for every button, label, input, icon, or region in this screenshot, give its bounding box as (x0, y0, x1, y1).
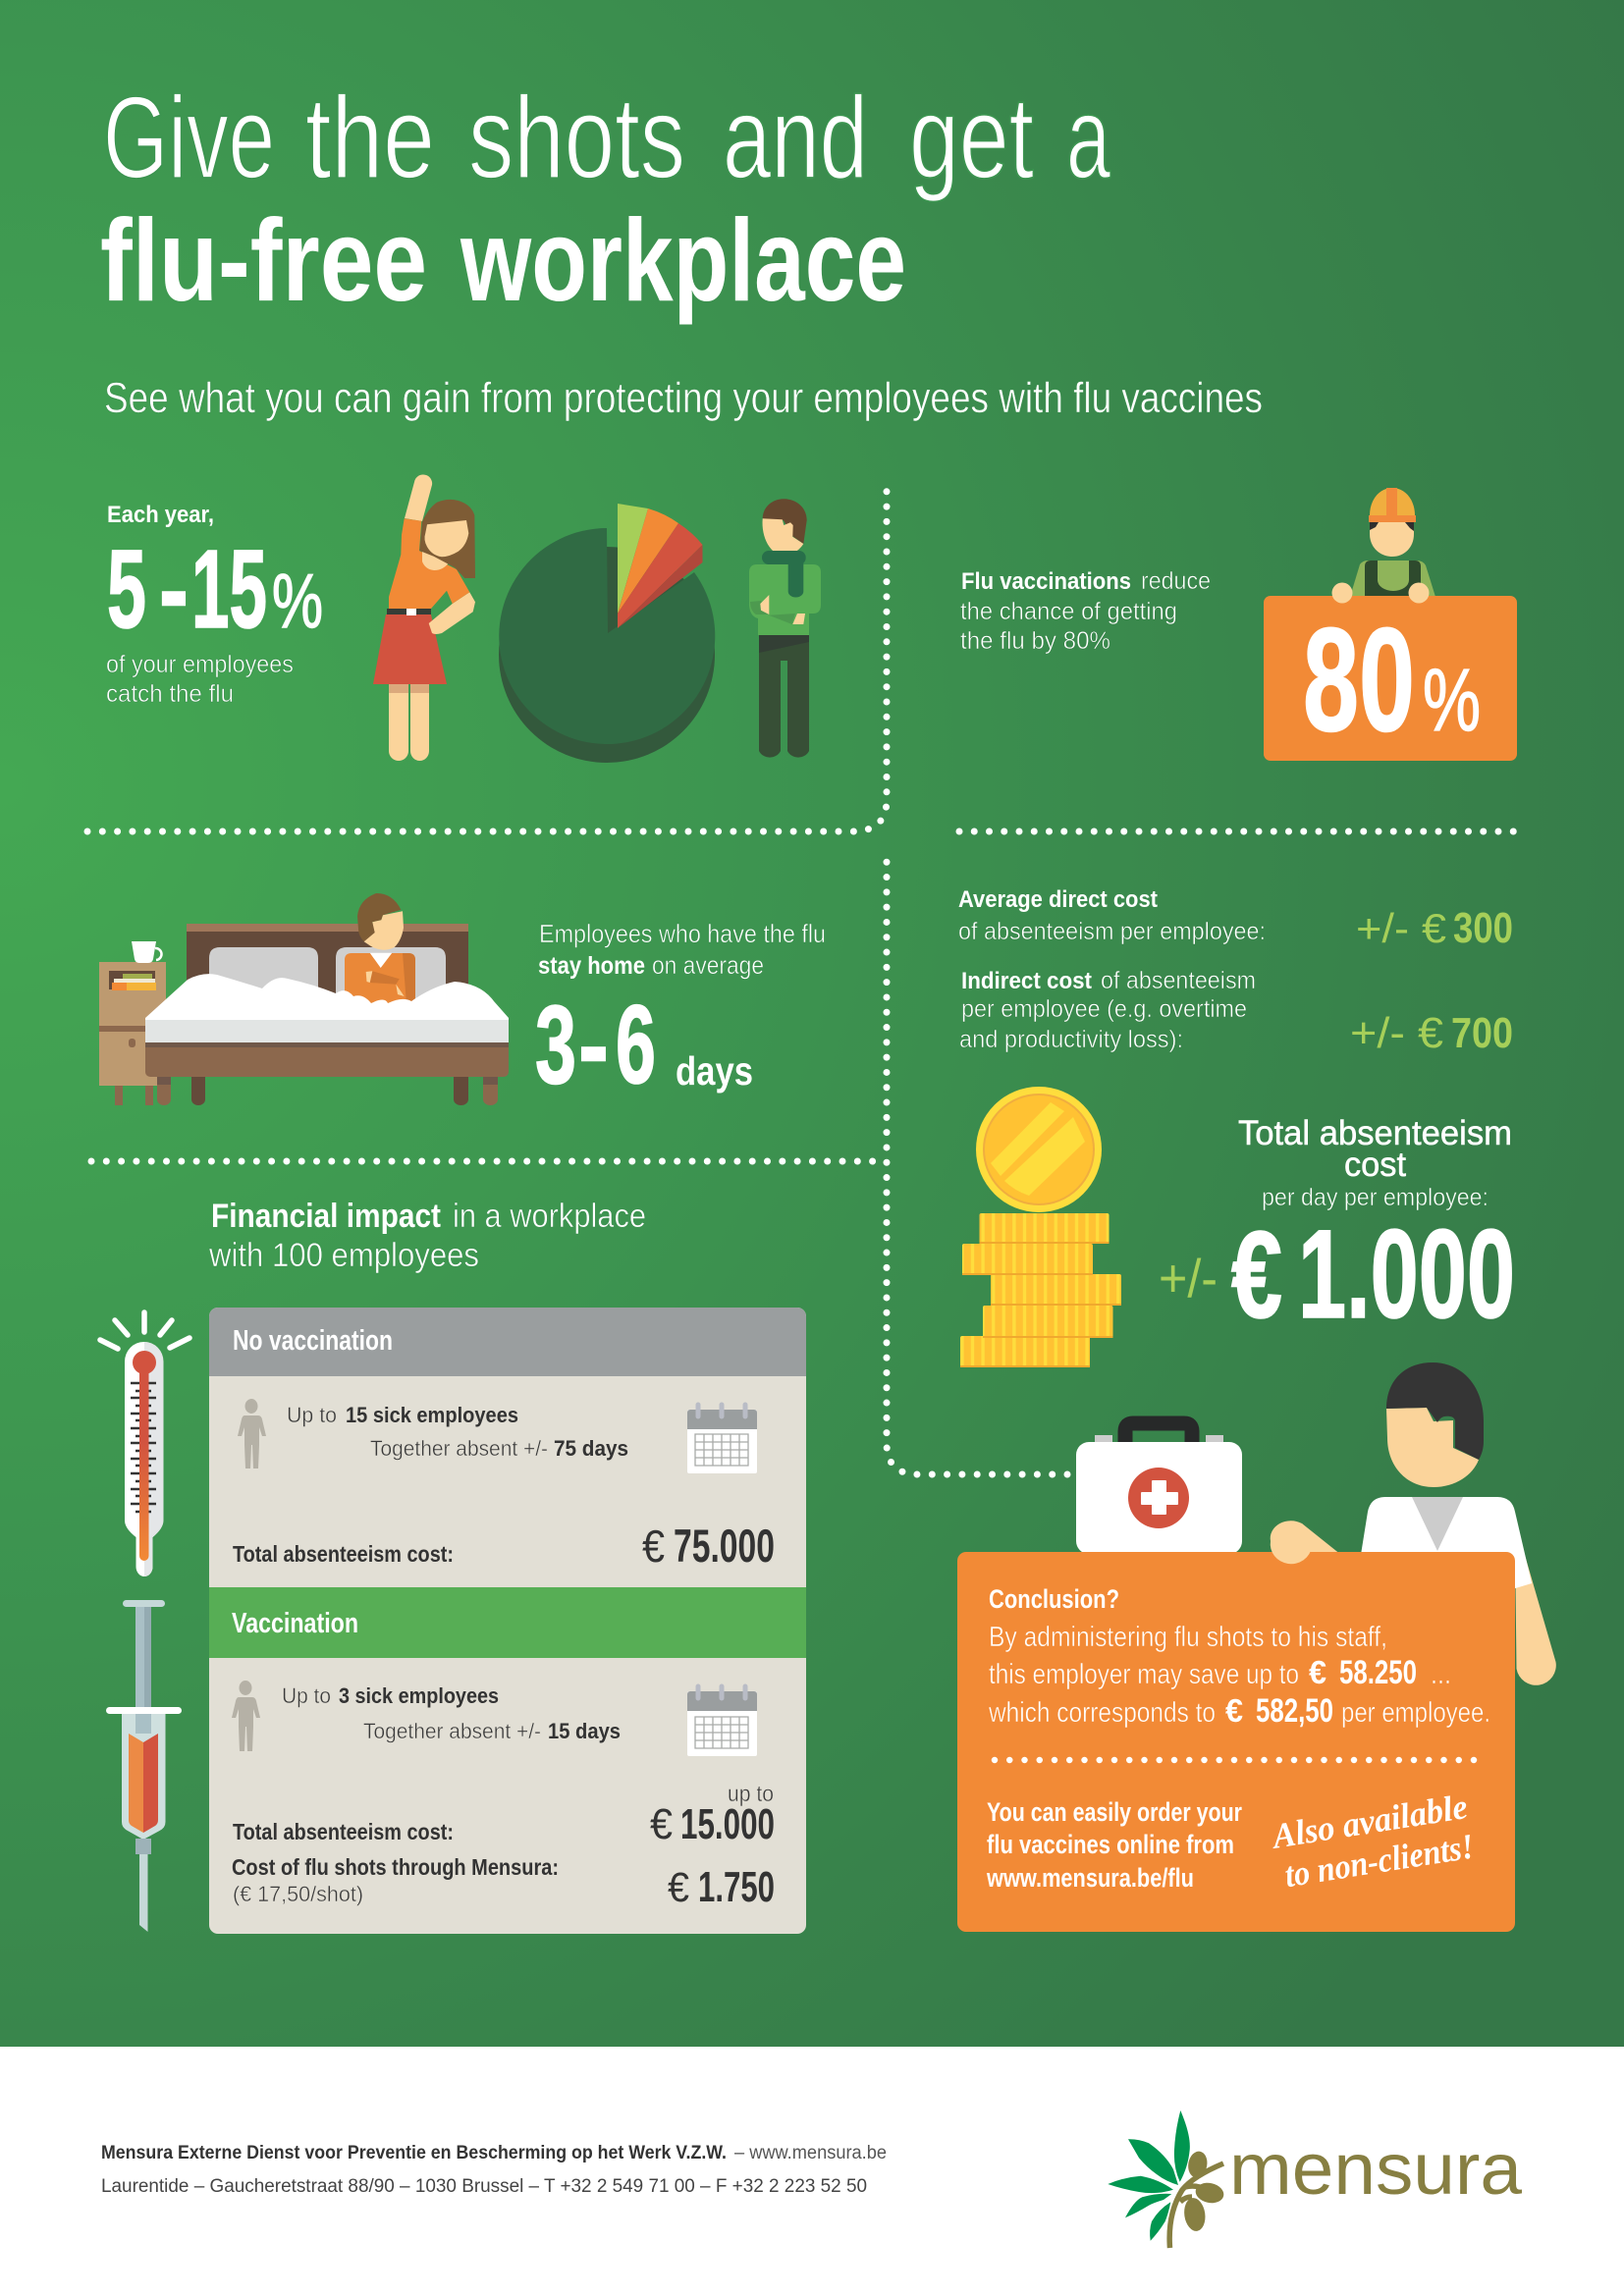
text: cost of flu shots: Cost of flu shots through Mensura: (232, 1854, 559, 1880)
statistic: 3-6 days: 6 (616, 983, 656, 1106)
title: shots (468, 73, 685, 203)
text: conclusion body: this employer may save up to (989, 1659, 1299, 1690)
icon: employee in bed (99, 893, 509, 1105)
text: also available to non-clients: Also available (1269, 1787, 1470, 1856)
bedside table (99, 941, 166, 1105)
footer address (101, 2143, 887, 2197)
value: indirect cost 700 euro: € (1418, 1009, 1443, 1057)
icon: thermometer (100, 1312, 189, 1576)
text: of your employees catch the flu: of your employees (106, 651, 294, 678)
value: 75.000 euro (642, 1520, 775, 1572)
text: conclusion body (988, 1622, 1490, 1730)
heading: financial impact: in a workplace (453, 1198, 646, 1235)
value: 75.000 euro: € (642, 1521, 665, 1572)
orange card: 80% (1264, 583, 1517, 762)
statistic: 5-15% (107, 527, 323, 651)
value: 15.000 euro: 15.000 (680, 1800, 775, 1848)
value: indirect cost 700 euro (1350, 1009, 1513, 1057)
text: conclusion body: ... (1431, 1659, 1451, 1690)
text: average direct cost: Average direct cost (958, 886, 1158, 913)
footer address: Laurentide – Gaucheretstraat 88/90 – 1030 Brussel – T +32 2 549 71 00 – F +32 2 223 52 50 (101, 2176, 867, 2197)
text: conclusion body: 582,50 (1256, 1692, 1333, 1730)
value: direct cost 300 euro (1356, 904, 1513, 952)
text: total absenteeism cost heading: cost (1344, 1146, 1406, 1184)
heading: financial impact: with 100 employees (208, 1237, 479, 1274)
text: total absenteeism cost heading: per day per employee: (1262, 1184, 1489, 1211)
text: up to 3 sick employees (282, 1683, 621, 1743)
text: indirect cost: Indirect cost (961, 968, 1092, 994)
statistic: 5-15%: 5 (107, 527, 146, 651)
pie chart: share of employees with flu (499, 504, 715, 763)
text: conclusion body: € (1309, 1654, 1326, 1690)
header: vaccination: Vaccination (232, 1608, 358, 1639)
text: indirect cost: per employee (e.g. overtime (961, 995, 1247, 1023)
title: a (1066, 73, 1111, 203)
text: conclusion body: By administering flu shots to his staff, (989, 1622, 1387, 1653)
text: order online (986, 1797, 1242, 1893)
panel: absenteeism costs (958, 886, 1515, 1367)
orange card: 80%: 80 (1303, 597, 1415, 762)
logo branch and olives (1169, 2150, 1225, 2248)
text: flu vaccinations reduce: the flu by 80% (960, 627, 1110, 655)
doctor hand over card (1271, 1521, 1312, 1564)
panel: sick days at home (99, 893, 826, 1106)
text: indirect cost: of absenteeism (1101, 967, 1256, 994)
text: employees who have the flu: on average (652, 950, 764, 980)
white footer band (0, 2047, 1624, 2296)
text: up to 15 sick employees: 75 days (554, 1436, 628, 1461)
text: up to 3 sick employees: Together absent +/- (363, 1719, 541, 1743)
icon: man with scarf (749, 499, 821, 758)
text: average direct cost: of absenteeism per employee: (958, 918, 1266, 945)
icon: calendar (687, 1686, 757, 1756)
sick person (345, 893, 415, 1006)
text: also available to non-clients: to non-clients! (1282, 1826, 1477, 1895)
statistic: 5-15%: % (272, 558, 323, 644)
statistic: 5-15%: - (159, 527, 189, 651)
statistic: 3-6 days (535, 983, 753, 1106)
value: indirect cost 700 euro: +/- (1350, 1009, 1405, 1057)
value: indirect cost 700 euro: 700 (1451, 1009, 1513, 1057)
subtitle: See what you can gain from protecting your employees with flu vaccines (104, 374, 1263, 422)
text: indirect cost: and productivity loss): (959, 1026, 1183, 1053)
footer address: – www.mensura.be (734, 2143, 887, 2163)
logo: mensura: mensura (1229, 2128, 1523, 2210)
header: no vaccination: No vaccination (233, 1325, 393, 1357)
icon: syringe (106, 1600, 182, 1932)
value: 15.000 euro (650, 1800, 775, 1848)
icon: vaccinated employee figure (232, 1681, 260, 1751)
statistic: 5-15%: 15 (191, 527, 267, 651)
statistic: 1.000 euro total: € (1231, 1207, 1282, 1344)
text: conclusion body: 58.250 (1339, 1654, 1417, 1691)
title: the (305, 73, 435, 203)
text: total absenteeism cost with vaccination: Total absenteeism cost: (233, 1819, 454, 1844)
title (100, 73, 1111, 326)
text: up to: up to (728, 1781, 774, 1806)
icon: sick employee figure (238, 1399, 266, 1468)
value: direct cost 300 euro: +/- (1356, 905, 1409, 951)
value: direct cost 300 euro: 300 (1453, 904, 1513, 952)
value: 1.750 euro (668, 1863, 775, 1911)
text: average direct cost (958, 886, 1266, 945)
text: up to 15 sick employees: Up to (287, 1403, 337, 1427)
text: up to 3 sick employees: 3 sick employees (339, 1683, 499, 1708)
title: workplace (460, 195, 906, 326)
value: 1.750 euro: 1.750 (698, 1863, 775, 1911)
icon: worker with hard hat (1350, 488, 1435, 597)
dotted divider: middle horizontal (91, 1158, 874, 1164)
title: and (723, 73, 868, 203)
text: up to 15 sick employees: 15 sick employees (346, 1403, 518, 1427)
icon: medical kit (1076, 1423, 1242, 1554)
orange conclusion card (957, 1552, 1515, 1932)
text: conclusion heading: Conclusion? (989, 1584, 1119, 1614)
text: order online: You can easily order your (987, 1797, 1242, 1827)
statistic: 3-6 days: days (676, 1048, 753, 1094)
title: Give (103, 73, 275, 203)
header: vaccination (209, 1587, 806, 1658)
text: up to 15 sick employees (287, 1403, 628, 1461)
statistic: 1.000 euro total: 1.000 (1298, 1204, 1515, 1345)
panel: financial comparison card (209, 1308, 806, 1934)
text: total absenteeism cost heading (1238, 1114, 1512, 1211)
text: each year: Each year, (107, 502, 214, 528)
dotted divider: right horizontal (959, 828, 1514, 834)
value: 1.750 euro: € (668, 1864, 689, 1911)
panel: vaccinations reduce chance (960, 488, 1517, 762)
text: up to 3 sick employees: Up to (282, 1683, 331, 1708)
text: up to 3 sick employees: 15 days (548, 1719, 621, 1743)
statistic: 1.000 euro total (1159, 1204, 1515, 1345)
text: flu vaccinations reduce: reduce (1141, 567, 1211, 595)
icon: doctor (1283, 1362, 1556, 1685)
text: flu vaccinations reduce (960, 567, 1211, 655)
text: of your employees catch the flu: catch the flu (106, 680, 234, 708)
value: 75.000 euro: 75.000 (674, 1520, 775, 1572)
dotted divider: left horizontal and top vertical (87, 478, 887, 831)
text: total absenteeism cost without vaccination: Total absenteeism cost: (233, 1541, 454, 1567)
dotted divider: lower vertical toward medical kit (887, 847, 1067, 1474)
logo leaves (1108, 2110, 1190, 2241)
text: order online: www.mensura.be/flu (986, 1863, 1194, 1893)
text: employees who have the flu (538, 919, 826, 980)
statistic: 3-6 days: 3 (535, 983, 576, 1106)
title: flu-free (100, 195, 427, 326)
heading: financial impact (208, 1198, 646, 1274)
text: conclusion body: € (1225, 1692, 1243, 1729)
heading: financial impact: Financial impact (211, 1198, 441, 1235)
statistic: 3-6 days: - (578, 983, 609, 1106)
text: also available to non-clients (1269, 1787, 1477, 1896)
text: indirect cost (959, 967, 1256, 1053)
text: of your employees catch the flu (106, 651, 294, 708)
text: conclusion body: per employee. (1341, 1697, 1490, 1729)
icon: calendar (687, 1405, 757, 1473)
text: employees who have the flu: stay home (538, 952, 645, 980)
text: cost of flu shots: (€ 17,50/shot) (233, 1882, 363, 1906)
panel: conclusion (957, 1362, 1556, 1932)
value: direct cost 300 euro: € (1422, 905, 1446, 951)
text: cost of flu shots (232, 1854, 559, 1906)
text: employees who have the flu: Employees who have the flu (539, 919, 826, 948)
text: conclusion body: which corresponds to (988, 1697, 1216, 1729)
orange card: 80%: % (1423, 652, 1481, 750)
icon: stack of coins (960, 1087, 1121, 1367)
icon: woman stretching (373, 474, 475, 761)
title: get (909, 73, 1034, 203)
value: 15.000 euro: € (650, 1800, 673, 1848)
text: flu vaccinations reduce: Flu vaccinations (961, 568, 1131, 595)
text: flu vaccinations reduce: the chance of getting (960, 598, 1177, 625)
statistic: 1.000 euro total: +/- (1159, 1248, 1218, 1308)
text: order online: flu vaccines online from (987, 1830, 1234, 1859)
header: no vaccination (209, 1308, 806, 1376)
text: total absenteeism cost heading: Total absenteeism (1238, 1114, 1512, 1152)
panel: yearly flu share (106, 474, 821, 763)
logo: mensura (1108, 2110, 1523, 2248)
text: up to 15 sick employees: Together absent +/- (370, 1436, 548, 1461)
footer address: Mensura Externe Dienst voor Preventie en Bescherming op het Werk V.Z.W. (101, 2143, 727, 2163)
